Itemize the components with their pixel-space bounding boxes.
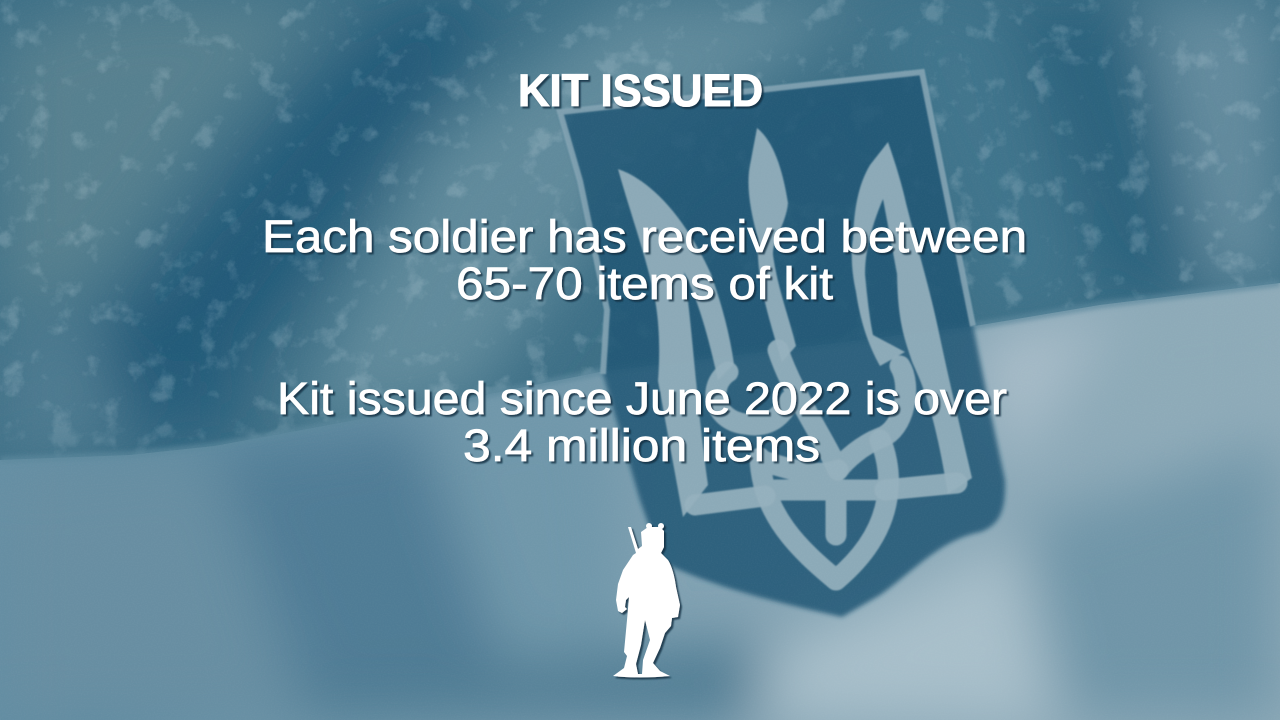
trident: lower bowl (760, 440, 888, 580)
trident: left arm (618, 169, 734, 517)
trident (618, 128, 972, 580)
text block: total kit issued: Kit issued since June 2022 is over (277, 373, 1007, 424)
title: KIT ISSUED (518, 65, 763, 116)
text block: total kit issued: 3.4 million items (463, 420, 820, 471)
emblem: Ukrainian trident shield (560, 72, 1005, 617)
shield shape (560, 72, 1005, 617)
text block: items per soldier (262, 211, 1027, 309)
icon: soldier silhouette (613, 523, 680, 678)
background: flag lower field (0, 283, 1280, 720)
shield outline (560, 72, 973, 374)
trident: base bars (695, 483, 957, 505)
text block: items per soldier: 65-70 items of kit (456, 258, 834, 309)
text block: items per soldier: Each soldier has received between (262, 211, 1027, 262)
text block: total kit issued (277, 373, 1007, 471)
background: flag upper field (0, 0, 1280, 460)
trident: right arm (852, 142, 972, 494)
trident: centre blade (748, 128, 796, 362)
trident: knot rings (716, 350, 906, 470)
